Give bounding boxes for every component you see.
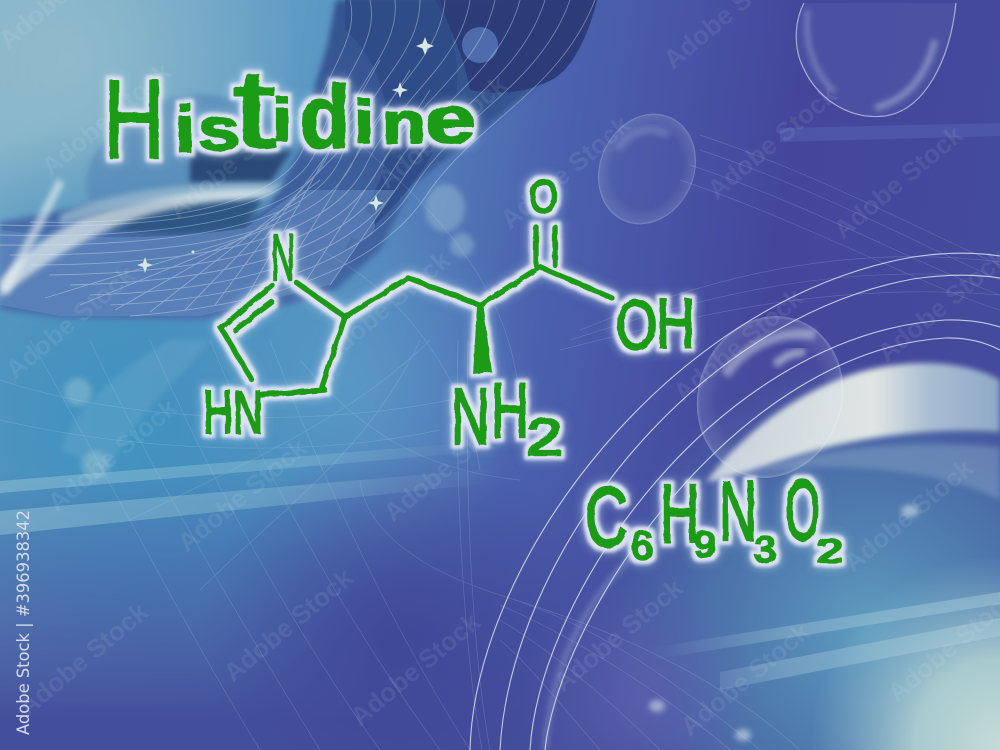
title: i [354, 89, 374, 156]
bubble: right [674, 295, 866, 499]
stock watermarks: Adobe Stock [163, 99, 304, 225]
stock watermarks: Adobe Stock [378, 402, 519, 528]
title: H [103, 57, 165, 182]
dark ribbon [0, 0, 597, 320]
stock watermarks: Adobe Stock [372, 69, 513, 195]
molecular formula: H [660, 467, 700, 560]
white swoosh left [0, 178, 280, 298]
title [103, 46, 476, 182]
atom labels: HN [203, 379, 263, 446]
molecular formula: 6 [631, 524, 653, 568]
molecular formula: 3 [754, 529, 776, 570]
ribbon lens behind title [86, 94, 300, 205]
stock watermarks: Adobe Stock [345, 606, 486, 732]
atom labels: H [491, 366, 529, 454]
title: n [382, 91, 426, 156]
stock watermarks: Adobe Stock [828, 119, 969, 245]
atom labels: O [529, 170, 558, 222]
atom labels: N [271, 220, 295, 294]
molecular formula: 2 [817, 533, 843, 569]
broad lower-left sweep [60, 340, 210, 470]
title: e [425, 82, 476, 158]
stock watermarks: Adobe Stock [315, 244, 456, 370]
molecular formula: C [585, 470, 628, 564]
stock id label: Adobe Stock | #396938342 [14, 510, 34, 735]
stock watermarks: Adobe Stock [702, 79, 843, 205]
stars [137, 37, 434, 273]
atom labels: N [451, 372, 490, 461]
bonds [221, 227, 612, 395]
atom labels: H [656, 284, 695, 362]
stereo wedge [473, 305, 492, 374]
molecular formula: O [785, 463, 820, 557]
stock watermarks: Adobe Stock [495, 109, 636, 235]
title: s [198, 96, 240, 163]
stock watermarks: Adobe Stock [668, 282, 809, 408]
stock watermarks: Adobe Stock [42, 392, 183, 518]
atom labels [203, 170, 695, 467]
horizontal light streaks [0, 123, 1000, 690]
bubble: centre [580, 97, 714, 241]
title: i [175, 92, 195, 166]
atom labels: O [616, 286, 657, 364]
title: t [232, 46, 276, 171]
stock watermarks: Adobe Stock [172, 432, 313, 558]
pale glow spots [64, 184, 474, 479]
ribbon mesh lines [0, 0, 595, 316]
white swoosh right [706, 363, 1000, 500]
stock watermarks: Adobe Stock [218, 562, 359, 688]
molecular formula: 9 [694, 524, 716, 565]
molecular formula [585, 463, 843, 570]
stock watermarks: Adobe Stock [838, 452, 979, 578]
bubble: top right [796, 3, 956, 117]
molecular formula: N [719, 464, 757, 558]
bubble arc bottom [545, 540, 650, 750]
bokeh spots [649, 505, 919, 741]
title: d [300, 68, 350, 168]
stock watermarks: Adobe Stock [36, 56, 177, 182]
stock watermarks: Adobe Stock [548, 572, 689, 698]
stock watermarks: Adobe Stock [13, 596, 154, 722]
title: i [272, 87, 292, 154]
stock watermarks: Adobe Stock [0, 259, 141, 385]
molecule structure [203, 170, 695, 467]
concentric arcs [470, 253, 1000, 750]
stock watermarks: Adobe Stock [675, 616, 816, 742]
atom labels: 2 [526, 409, 563, 467]
